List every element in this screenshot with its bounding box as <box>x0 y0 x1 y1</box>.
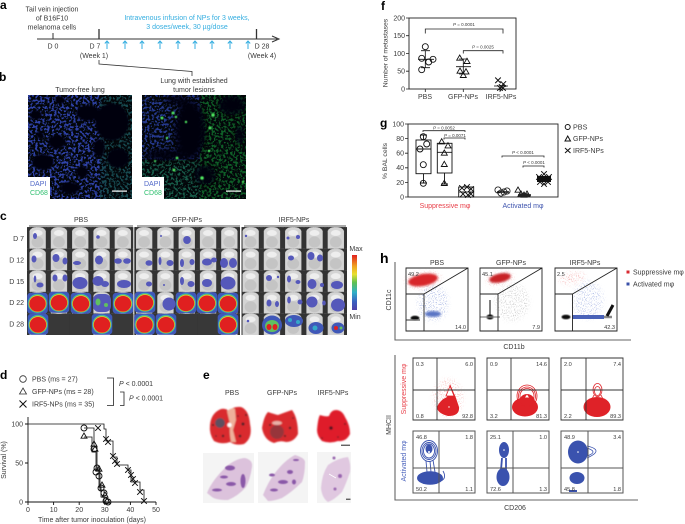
DAPI CD68 key: CD68 <box>30 190 48 197</box>
contour: activated IRF5-NPs: 48.9 <box>564 435 575 441</box>
panel g: BAL cell box plots: % BAL cells <box>382 142 389 179</box>
group headers <box>29 217 346 226</box>
panel g: BAL cell box plots: 0 <box>400 194 404 202</box>
day labels: (Week 1) <box>80 53 108 60</box>
day labels: D 12 <box>9 258 24 264</box>
category labels: Suppressive mφ <box>420 203 471 210</box>
IRF5 markers <box>95 425 147 504</box>
legend <box>565 122 604 155</box>
micrograph: established tumor lesions: Lung with established <box>160 78 228 85</box>
contour: suppressive GFP-NPs <box>487 358 549 420</box>
survival chart: 20 <box>75 507 83 514</box>
histology: IRF5-NPs <box>317 452 351 503</box>
dot plot: IRF5-NPs <box>555 268 617 331</box>
group headers: PBS <box>74 217 88 224</box>
scale bar <box>226 190 241 192</box>
column headers: GFP-NPs <box>496 260 526 267</box>
panel g: BAL cell box plots: P < 0.0001 <box>523 160 545 165</box>
dot plot: IRF5-NPs: 42.3 <box>604 325 615 331</box>
lung photo: PBS <box>210 407 251 445</box>
contour: activated GFP-NPs <box>487 431 549 493</box>
contour: activated PBS: 46.8 <box>416 435 427 441</box>
axes: CD11c vs CD11b <box>386 262 631 351</box>
dot plot: GFP-NPs: 7.9 <box>532 325 540 331</box>
contour: suppressive PBS: 6.0 <box>465 362 473 368</box>
panel g: BAL cell box plots: 100 <box>392 122 404 128</box>
panel g: BAL cell box plots: P = 0.0052 <box>433 126 455 130</box>
panel f: metastases scatter plot: P = 0.0001 <box>453 22 475 27</box>
day labels <box>48 44 276 60</box>
group labels: PBS <box>225 390 239 397</box>
panel c: bioluminescence imaging grid: c <box>0 209 7 223</box>
axes: MHCII vs CD206: CD206 <box>504 505 526 512</box>
DAPI CD68 key <box>28 177 50 199</box>
panel e: lungs and histology <box>203 368 351 503</box>
legend: IRF5-NPs (ms = 35) <box>32 402 94 408</box>
contour: suppressive GFP-NPs: 3.2 <box>490 414 498 420</box>
panel h: flow cytometry: h <box>380 250 389 266</box>
contour: activated GFP-NPs: 72.6 <box>490 487 501 493</box>
panel f: metastases scatter plot: 200 <box>393 16 405 22</box>
panel a: treatment timeline <box>0 0 279 76</box>
panel d: survival curves <box>0 368 163 524</box>
scale bar <box>346 499 350 500</box>
panel g: BAL cell box plots: g <box>380 116 387 130</box>
GFP markers <box>81 433 110 503</box>
legend: Activated mφ <box>633 282 675 288</box>
panel f: metastases scatter plot: P = 0.0025 <box>472 44 494 50</box>
panel f: metastases scatter plot: 100 <box>393 51 405 58</box>
axes: MHCII vs CD206: Activated mφ <box>401 440 408 482</box>
contour: suppressive IRF5-NPs: 7.4 <box>613 362 621 368</box>
axes: MHCII vs CD206: MHCII <box>386 415 393 435</box>
survival chart <box>1 417 160 524</box>
contour: activated GFP-NPs: 1.3 <box>539 487 547 493</box>
panel d: survival curves: d <box>0 368 7 382</box>
injection label <box>26 6 79 32</box>
IRF5 points <box>494 78 508 91</box>
contour: suppressive PBS: 0.3 <box>416 362 424 368</box>
histology: PBS <box>203 453 254 503</box>
day labels: (Week 4) <box>248 53 276 60</box>
weak signal <box>32 233 345 322</box>
contour: activated PBS: 1.8 <box>465 435 473 441</box>
DAPI CD68 key: DAPI <box>30 181 46 188</box>
contour: suppressive PBS: 92.8 <box>462 414 473 420</box>
column headers: IRF5-NPs <box>570 260 601 267</box>
contour: activated GFP-NPs: 25.1 <box>490 435 501 441</box>
legend <box>626 270 684 288</box>
legend: IRF5-NPs <box>573 148 604 155</box>
panel f: metastases scatter plot: 50 <box>397 68 405 76</box>
panel h: flow cytometry <box>380 250 684 512</box>
survival chart: 50 <box>152 507 160 514</box>
legend: GFP-NPs <box>573 136 603 143</box>
DAPI CD68 key <box>142 177 164 199</box>
panel c: bioluminescence imaging grid <box>0 209 363 335</box>
column headers <box>430 260 601 267</box>
color scale: Min <box>349 314 361 321</box>
micrograph: tumor-free lung: Tumor-free lung <box>55 87 105 94</box>
lung photo: GFP-NPs <box>262 410 298 443</box>
infusion arrows <box>105 41 250 49</box>
injection label: Tail vein injection <box>26 6 79 14</box>
panel f: metastases scatter plot <box>381 0 517 101</box>
significance brackets <box>425 29 503 54</box>
contour: suppressive IRF5-NPs <box>561 358 623 420</box>
DAPI CD68 key: CD68 <box>144 190 162 197</box>
micrograph: established tumor lesions: tumor lesions <box>173 87 215 94</box>
mouse image grid <box>27 227 347 335</box>
survival chart: Time after tumor inoculation (days) <box>38 517 146 524</box>
contour: suppressive GFP-NPs: 0.9 <box>490 362 498 368</box>
contour: activated IRF5-NPs <box>561 431 623 493</box>
infusion label <box>124 15 250 31</box>
legend: PBS <box>573 122 588 132</box>
panel g: BAL cell box plots: 80 <box>396 136 404 143</box>
connector to lesions <box>99 60 192 76</box>
micrograph: tumor-free lung <box>28 87 132 199</box>
lung photo: IRF5-NPs <box>317 410 350 442</box>
legend: Suppressive mφ <box>633 270 684 276</box>
panel g: BAL cell box plots <box>380 116 604 210</box>
dot plot: PBS: 14.0 <box>455 325 466 331</box>
legend: GFP-NPs (ms = 28) <box>32 389 94 396</box>
panel g: BAL cell box plots: 40 <box>396 165 404 172</box>
survival chart: 0 <box>19 500 23 506</box>
group labels <box>225 390 349 397</box>
timeline axis <box>37 29 279 42</box>
panel g: BAL cell box plots: 60 <box>396 150 404 158</box>
group labels: GFP-NPs <box>267 390 297 397</box>
infusion label: Intravenous infusion of NPs for 3 weeks, <box>124 15 250 22</box>
micrograph: established tumor lesions <box>142 78 246 199</box>
panel b: lung immunofluorescence <box>0 70 246 199</box>
dot plot: IRF5-NPs: 2.5 <box>557 272 565 278</box>
group headers: GFP-NPs <box>172 217 202 224</box>
contour: activated PBS: 50.2 <box>416 487 427 493</box>
day labels: D 28 <box>255 44 269 50</box>
panel f: metastases scatter plot: GFP-NPs <box>448 94 478 101</box>
PBS markers <box>81 425 111 505</box>
box: GFP suppressive <box>437 139 452 186</box>
contour: suppressive PBS <box>413 358 475 420</box>
survival chart: Survival (%) <box>1 441 8 479</box>
day labels: D 15 <box>9 279 24 286</box>
day labels: D 7 <box>13 236 24 243</box>
strong signal <box>27 292 344 335</box>
column headers: PBS <box>430 260 444 267</box>
survival chart: 0 <box>26 507 30 514</box>
survival chart: 100 <box>11 422 23 428</box>
PBS points <box>418 44 436 73</box>
color scale <box>349 246 363 321</box>
panel f: metastases scatter plot: IRF5-NPs <box>486 94 517 101</box>
injection label: of B16F10 <box>36 16 68 22</box>
dot plot: PBS: 49.2 <box>408 272 419 278</box>
P value brackets <box>107 378 163 406</box>
dot plot: PBS <box>403 268 468 331</box>
dot plot: GFP-NPs: 45.1 <box>482 272 493 278</box>
contour: activated PBS: 1.1 <box>465 487 473 493</box>
color scale: Max <box>349 246 363 253</box>
day labels: D 22 <box>9 300 24 307</box>
legend: PBS (ms = 27) <box>32 376 78 384</box>
contour: suppressive GFP-NPs: 14.6 <box>536 362 547 368</box>
contour: suppressive GFP-NPs: 81.3 <box>536 414 547 420</box>
P value brackets: P < 0.0001 <box>119 381 153 388</box>
panel g: BAL cell box plots: P < 0.0001 <box>512 150 534 155</box>
histology: GFP-NPs <box>258 452 308 503</box>
survival chart: 30 <box>101 507 109 514</box>
scale bar <box>112 190 127 192</box>
box: PBS suppressive <box>416 134 431 186</box>
PBS and GFP curves <box>28 424 109 502</box>
scale bar <box>341 445 350 446</box>
injection label: melanoma cells <box>28 24 77 32</box>
dead animals <box>48 314 218 335</box>
panel f: metastases scatter plot: PBS <box>418 94 432 101</box>
group labels: IRF5-NPs <box>318 390 349 397</box>
day labels: D 0 <box>48 44 59 50</box>
contour: suppressive IRF5-NPs: 2.0 <box>564 362 572 368</box>
contour: activated PBS <box>413 431 475 493</box>
contour: suppressive PBS: 0.8 <box>416 414 424 420</box>
axes: CD11c vs CD11b: CD11c <box>386 289 393 310</box>
P value brackets: P < 0.0001 <box>129 396 163 402</box>
group headers: IRF5-NPs <box>279 217 310 224</box>
points: activated macrophages <box>495 171 552 197</box>
category labels <box>420 203 544 210</box>
contour: activated GFP-NPs: 1.0 <box>539 435 547 441</box>
survival chart: 40 <box>127 507 134 514</box>
category labels: Activated mφ <box>502 203 544 210</box>
axes: CD11c vs CD11b: CD11b <box>503 344 525 351</box>
contour: suppressive IRF5-NPs: 89.3 <box>610 414 621 420</box>
day labels: D 28 <box>9 322 24 328</box>
axes: MHCII vs CD206: Suppressive mφ <box>401 363 408 414</box>
panel f: metastases scatter plot: 150 <box>393 33 405 40</box>
infusion label: 3 doses/week, 30 µg/dose <box>146 24 228 31</box>
panel f: metastases scatter plot: 0 <box>401 86 405 94</box>
panel g: BAL cell box plots: P = 0.0071 <box>444 133 466 138</box>
day labels <box>9 236 24 328</box>
significance brackets <box>423 131 544 168</box>
dot plot: GFP-NPs <box>480 268 542 331</box>
contour: suppressive IRF5-NPs: 2.2 <box>564 414 572 420</box>
panel f: metastases scatter plot: Number of metastases <box>382 18 390 87</box>
axes: MHCII vs CD206 <box>386 355 638 512</box>
contour: activated IRF5-NPs: 3.4 <box>613 435 621 441</box>
survival chart: 50 <box>15 460 23 468</box>
IRF5 curve <box>97 424 146 502</box>
panel g: BAL cell box plots: 20 <box>396 180 404 187</box>
box: IRF5 suppressive <box>459 184 474 198</box>
contour: activated IRF5-NPs: 45.8 <box>564 487 575 493</box>
panel e: lungs and histology: e <box>203 368 210 382</box>
day labels: D 7 <box>90 44 101 50</box>
contour: activated IRF5-NPs: 1.8 <box>613 487 621 493</box>
survival chart: 10 <box>50 507 58 514</box>
DAPI CD68 key: DAPI <box>144 181 160 188</box>
GFP points <box>456 55 471 78</box>
legend <box>20 376 94 408</box>
